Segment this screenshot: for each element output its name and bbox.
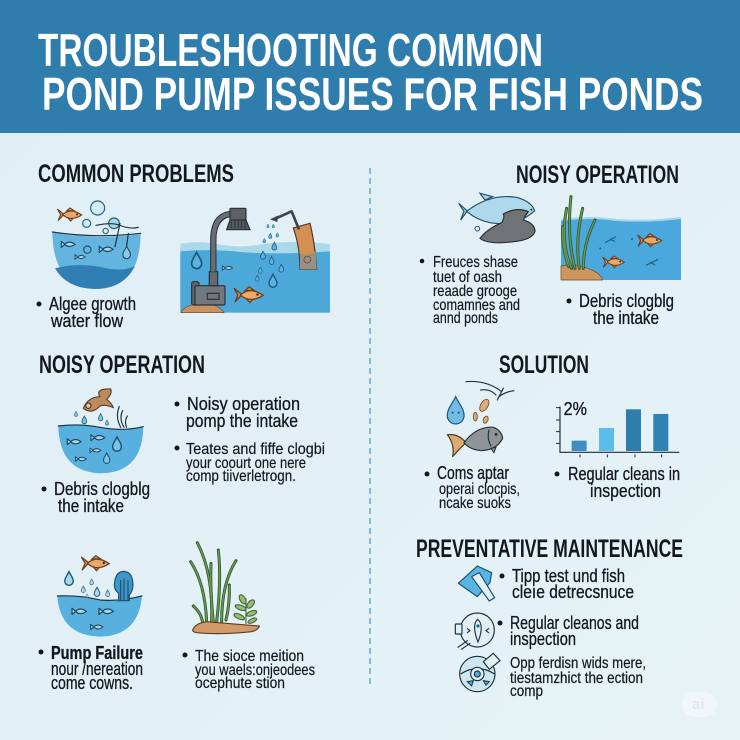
bullet: debris clogging: Debris clogblg	[579, 291, 674, 311]
bullet: regular cleans: Regular cleans in	[568, 464, 680, 484]
bullet: coms aptar: operai clocpis,	[439, 481, 520, 498]
bullet: noisy operation pump	[174, 394, 300, 431]
bullet: the sioce meition: The sioce meition	[195, 648, 304, 665]
bullet: noisy operation pump: Noisy operation	[187, 394, 300, 414]
panel: solution	[424, 351, 680, 512]
bullet: debris clogging left: Debris clogblg	[54, 479, 150, 499]
bullet: regular cleans	[554, 464, 680, 501]
title: TROUBLESHOOTING COMMON	[38, 24, 543, 76]
bullet: frequency text: reaade grooge	[433, 283, 517, 300]
heading: noisy operation left: NOISY OPERATION	[39, 351, 205, 379]
bullet: frequency text: tuet of oash	[433, 269, 502, 286]
text: opp ferdisn: comp	[510, 683, 543, 700]
bullet: tipp test	[500, 566, 634, 602]
text: opp ferdisn	[510, 655, 646, 700]
bullet: pump failure: come cowns.	[51, 673, 133, 693]
header band	[0, 0, 740, 133]
bullet: algae growth: water flow	[50, 311, 124, 331]
bullet: the sioce meition	[182, 648, 315, 692]
bullet: frequency text: comamnes and	[433, 297, 520, 314]
bullet: tipp test: cleıe detrecsnuce	[512, 582, 634, 602]
icon: pump impeller	[460, 653, 500, 692]
badge: ai watermark: ai	[692, 696, 705, 713]
bullet: regular cleanos	[498, 613, 639, 649]
title	[38, 24, 703, 120]
icon: pond bowl with algae	[52, 201, 141, 289]
heading: common problems: COMMON PROBLEMS	[38, 160, 234, 188]
bullet: frequency text: annd ponds	[433, 310, 498, 327]
column divider	[369, 168, 371, 686]
bullet: noisy operation pump: pomp the intake	[186, 411, 298, 431]
bullet: pump failure: nour /nereation	[51, 659, 143, 679]
panel: noisy operation left	[39, 351, 325, 516]
icon: aquatic plants	[191, 543, 259, 634]
icon: inspection gauge	[455, 613, 494, 649]
text: opp ferdisn: Opp ferdisn wids mere,	[510, 655, 646, 672]
panel: pump failure	[38, 543, 315, 693]
icon: fish with drop and seeds	[447, 381, 514, 457]
bullet: teates text: comp tiiverletrogn.	[186, 468, 296, 485]
bar chart	[556, 398, 679, 457]
panel: common problems	[36, 160, 330, 331]
icon: tool	[458, 566, 495, 601]
bullet: teates text	[174, 441, 325, 485]
bullet: debris clogging: the intake	[593, 308, 659, 328]
bullet: teates text: Teates and fiffe clogbi	[186, 441, 325, 458]
icon: fish above pond	[58, 389, 143, 473]
bullet: debris clogging left	[42, 479, 150, 516]
bullet: regular cleanos: Regular cleanos and	[510, 613, 639, 633]
bullet: pump failure	[38, 643, 143, 693]
bullet: algae growth: Algee growth	[49, 294, 136, 314]
badge: ai watermark	[682, 692, 717, 717]
bullet: pump failure: Pump Failure	[51, 643, 143, 663]
heading: solution: SOLUTION	[499, 351, 589, 379]
bullet: teates text: your coourt one nere	[186, 455, 306, 472]
bullet: debris clogging left: the intake	[58, 496, 124, 516]
bullet: coms aptar	[424, 463, 520, 512]
panel: noisy operation right	[420, 161, 681, 328]
bullet: regular cleanos: inspection	[510, 629, 576, 649]
bullet: coms aptar: ncake suoks	[439, 495, 511, 512]
bullet: regular cleans: inspection	[590, 481, 661, 501]
bullet: frequency text	[420, 254, 520, 327]
icon: fish on rock	[459, 193, 535, 243]
illustration: pump in pond	[180, 208, 330, 313]
bullet: tipp test: Tipp test und fish	[512, 566, 625, 586]
bullet: frequency text: Freuces shase	[433, 254, 518, 271]
bullet: coms aptar: Coms aptar	[437, 463, 509, 483]
bullet: the sioce meition: you waels:onjeodees	[195, 662, 315, 679]
bar chart: 2%	[564, 398, 587, 419]
icon: pond with fish and jellyfish	[57, 556, 142, 637]
bullet: the sioce meition: ocephute stion	[195, 675, 285, 692]
text: opp ferdisn: tiestamzhict the ection	[510, 670, 643, 687]
illustration: pond with plants	[561, 197, 681, 280]
panel: preventative maintenance	[416, 535, 683, 700]
bullet: algae growth	[36, 294, 136, 331]
bullet: debris clogging	[566, 291, 674, 328]
